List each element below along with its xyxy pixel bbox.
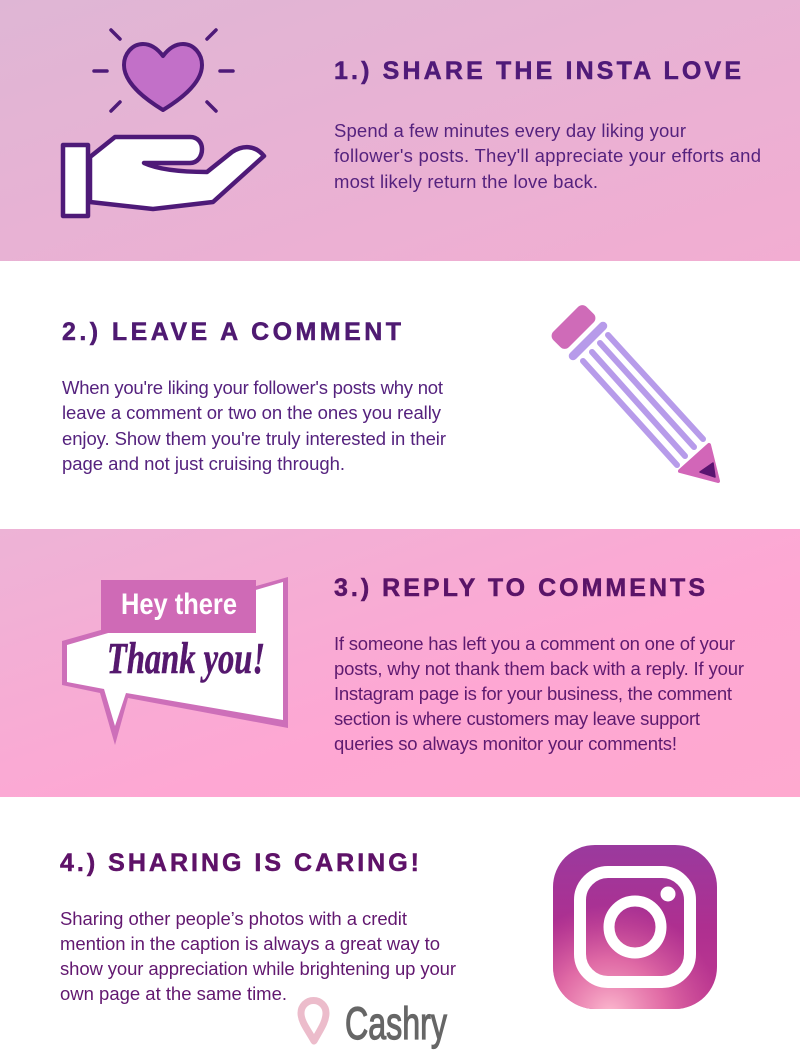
text block 1 xyxy=(334,120,761,192)
panel: leave a comment xyxy=(0,261,800,529)
text block 1: most likely return the love back. xyxy=(334,171,598,192)
text block 2: leave a comment or two on the ones you really xyxy=(62,402,442,423)
script text: Thank you! xyxy=(107,634,265,683)
heading 3: 3.) REPLY TO COMMENTS xyxy=(334,574,705,602)
text block 3: Instagram page is for your business, the comment xyxy=(334,683,732,704)
icon: pencil xyxy=(549,303,718,481)
panel: share the insta love xyxy=(0,0,800,261)
pencil band xyxy=(573,326,603,356)
panel: sharing is caring xyxy=(0,797,800,1062)
logo glow xyxy=(553,845,717,1009)
heading 2: 2.) LEAVE A COMMENT xyxy=(62,318,401,346)
text block 2: page and not just cruising through. xyxy=(62,453,345,474)
panel 3 background xyxy=(0,529,800,797)
icon: instagram logo xyxy=(553,845,717,1009)
text block 1: Spend a few minutes every day liking your xyxy=(334,120,686,141)
text block 4: show your appreciation while brightening up your xyxy=(60,958,456,979)
pencil body lines xyxy=(583,335,703,465)
logo lens xyxy=(609,901,661,953)
pencil eraser xyxy=(549,303,598,351)
pencil tip xyxy=(680,445,718,481)
text block 3: posts, why not thank them back with a reply. If your xyxy=(334,658,744,679)
panel 1 background xyxy=(0,0,800,261)
speech bubble graphic xyxy=(62,577,288,745)
icon: hand xyxy=(90,137,264,209)
text block 2 xyxy=(62,377,446,474)
panel 2 background xyxy=(0,261,800,529)
icon: hand holding heart xyxy=(63,30,264,216)
icon: cuff xyxy=(63,145,88,216)
pencil lead xyxy=(700,463,715,477)
bubble outline xyxy=(62,577,288,745)
bubble interior xyxy=(67,582,283,726)
logo background xyxy=(553,845,717,1009)
heading 1: 1.) SHARE THE INSTA LOVE xyxy=(334,57,741,85)
text block 4: mention in the caption is always a great way to xyxy=(60,933,440,954)
icon: heart xyxy=(124,44,202,110)
text block 3 xyxy=(334,633,744,754)
panel 4 background xyxy=(0,797,800,1062)
panel: reply to comments xyxy=(0,529,800,797)
logo dot xyxy=(660,886,676,902)
icon: map pin xyxy=(301,1000,326,1041)
text block 3: If someone has left you a comment on one of your xyxy=(334,633,735,654)
text block 4 xyxy=(60,908,456,1004)
text block 3: section is where customers may leave support xyxy=(334,708,700,729)
bubble banner xyxy=(101,580,256,633)
icon: heart rays xyxy=(94,30,233,111)
wordmark: Cashry xyxy=(345,998,447,1049)
banner text: Hey there xyxy=(121,588,237,621)
logo frame xyxy=(580,872,690,982)
text block 3: queries so always monitor your comments! xyxy=(334,733,677,754)
text block 2: enjoy. Show them you're truly interested in their xyxy=(62,428,446,449)
logo: Cashry xyxy=(301,998,447,1049)
text block 4: own page at the same time. xyxy=(60,983,287,1004)
heading 4: 4.) SHARING IS CARING! xyxy=(60,849,419,877)
text block 2: When you're liking your follower's posts why not xyxy=(62,377,443,398)
text block 4: Sharing other people’s photos with a credit xyxy=(60,908,407,929)
text block 1: follower's posts. They'll appreciate your efforts and xyxy=(334,145,761,166)
